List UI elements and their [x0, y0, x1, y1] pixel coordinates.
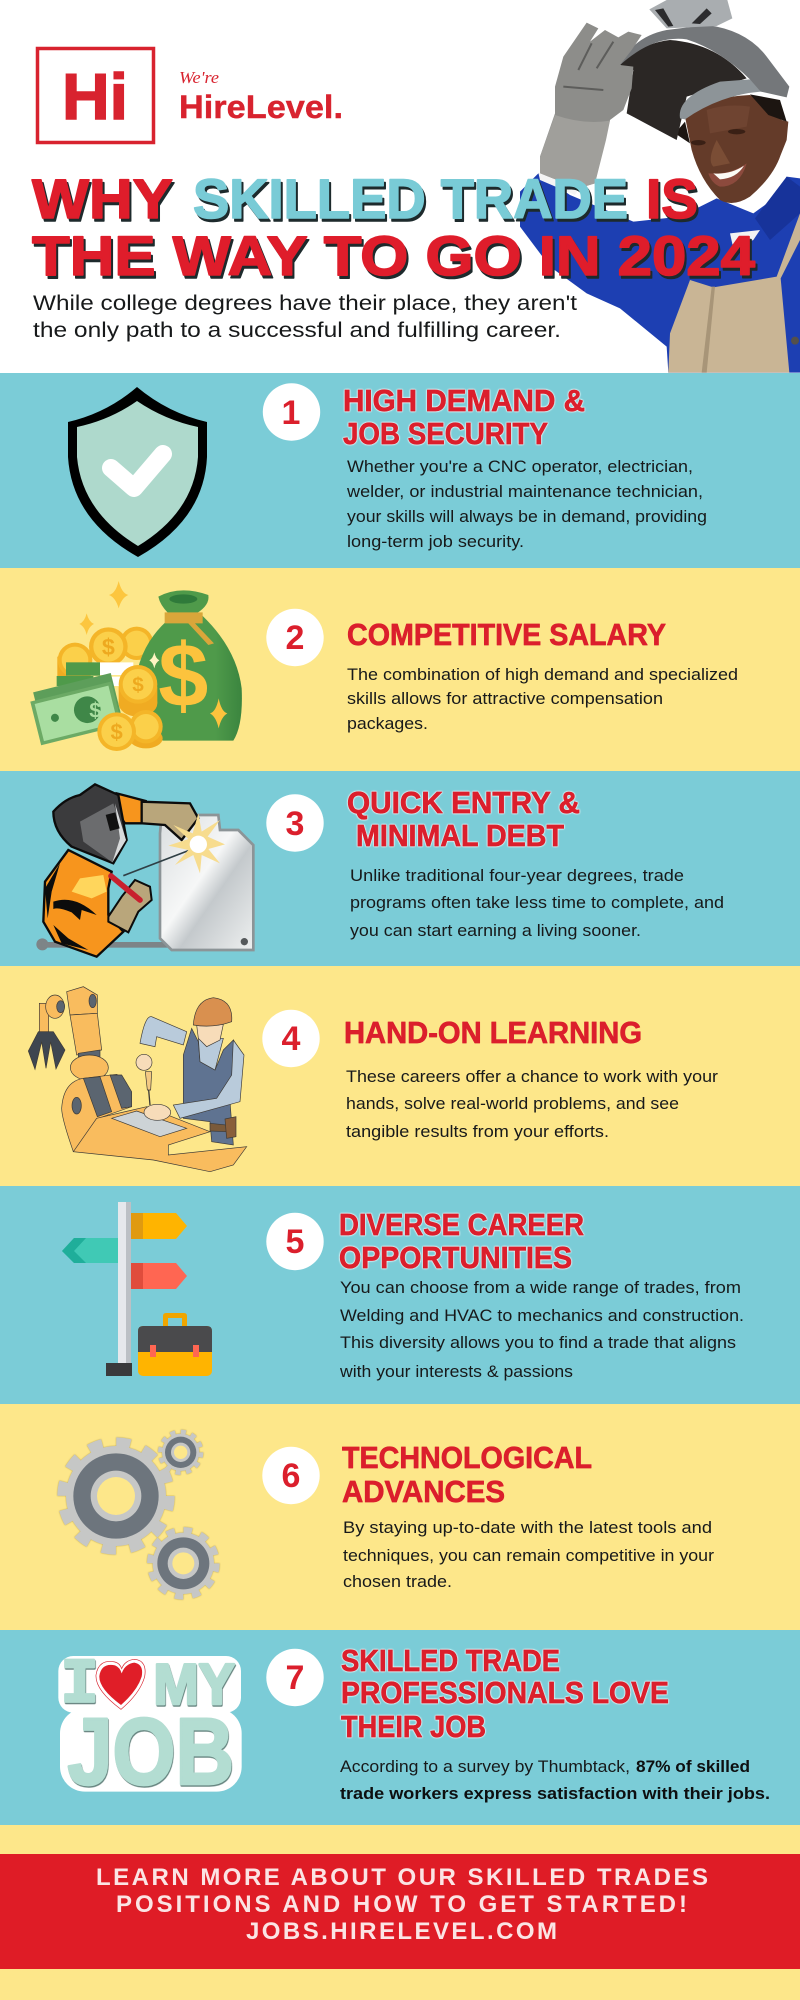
heading: [341, 1643, 669, 1744]
heading: [342, 1440, 592, 1509]
title: [32, 167, 755, 287]
call to action banner: LEARN MORE ABOUT OUR SKILLED TRADES: [96, 1864, 708, 1891]
logo mark: Hi: Hi: [62, 60, 128, 133]
body text: programs often take less time to complete, and: [350, 893, 724, 912]
logo wordmark: We're HireLevel: [179, 68, 343, 125]
number badge 6: [262, 1447, 320, 1504]
body text: techniques, you can remain competitive in your: [343, 1546, 714, 1565]
number badge 7: [266, 1649, 324, 1706]
heading: QUICK ENTRY &: [347, 785, 580, 820]
number badge 1: 1: [282, 394, 300, 432]
number badge 6: 6: [282, 1457, 300, 1495]
subtitle: While college degrees have their place, they aren't: [33, 292, 577, 315]
body text: chosen trade.: [343, 1572, 452, 1591]
title: WHY: [32, 167, 173, 230]
logo mark: Hi: [38, 48, 154, 142]
call to action banner: [0, 1854, 800, 1969]
icon: shield with check: [68, 387, 207, 557]
icon: money bag, coins and bills: $: [132, 674, 144, 697]
helmet window: [649, 0, 732, 28]
panel: technological advances: [0, 1404, 800, 1630]
subtitle: the only path to a successful and fulfilling career.: [33, 319, 561, 342]
icon: I love my job sticker: I: [61, 1650, 99, 1722]
body text: The combination of high demand and specialized: [347, 665, 738, 684]
body text: According to a survey by Thumbtack,: [340, 1757, 630, 1776]
icon: signpost and briefcase: [62, 1202, 212, 1376]
heading: OPPORTUNITIES: [339, 1240, 572, 1275]
number badge 4: [262, 1010, 320, 1067]
panel: hand-on learning: [0, 966, 800, 1186]
call to action banner: POSITIONS AND HOW TO GET STARTED!: [116, 1891, 687, 1918]
body text: 87% of skilled: [636, 1757, 750, 1776]
body text: Welding and HVAC to mechanics and construction.: [340, 1306, 744, 1325]
photo: smiling welder lifting helmet: [520, 0, 800, 373]
number badge 3: [266, 794, 324, 852]
body text: [339, 1278, 744, 1381]
yellow spacer band: [0, 1825, 800, 2000]
icon: I love my job sticker: JOB: [67, 1699, 234, 1805]
header panel: [0, 0, 800, 373]
number badge 5: [266, 1213, 324, 1270]
body text: trade workers express satisfaction with their jobs.: [340, 1784, 770, 1803]
body text: skills allows for attractive compensation: [347, 689, 663, 708]
panel: high demand and job security: [0, 373, 800, 568]
heading: HAND-ON LEARNING: [344, 1015, 642, 1050]
heading: HIGH DEMAND &: [343, 383, 585, 418]
heading: MINIMAL DEBT: [356, 818, 564, 853]
heading: [339, 1207, 584, 1275]
body text: [346, 457, 707, 551]
call to action banner: JOBS.HIRELEVEL.COM: [246, 1918, 557, 1945]
body text: [346, 1067, 718, 1141]
helmet interior: [620, 40, 747, 140]
body text: You can choose from a wide range of trades, from: [340, 1278, 741, 1297]
body text: [343, 1518, 714, 1591]
panel: quick entry and minimal debt: [0, 771, 800, 966]
title: SKILLED TRADE: [193, 167, 628, 230]
number badge 5: 5: [286, 1223, 304, 1261]
hair: [750, 94, 787, 122]
heading: ADVANCES: [342, 1474, 505, 1509]
logo wordmark: We're HireLevel: We're: [179, 68, 219, 87]
heading: THEIR JOB: [341, 1709, 486, 1744]
number badge 7: 7: [286, 1659, 304, 1697]
number badge 3: 3: [286, 805, 304, 843]
apron: [668, 213, 800, 373]
heading: [343, 383, 585, 451]
panel: competitive salary: [0, 568, 800, 771]
body text: packages.: [347, 714, 428, 733]
body text: [347, 665, 738, 733]
number badge 2: [266, 609, 324, 666]
body text: By staying up-to-date with the latest tools and: [343, 1518, 712, 1537]
icon: I love my job sticker: [58, 1650, 242, 1805]
subtitle: [33, 292, 577, 342]
body text: These careers offer a chance to work with your: [346, 1067, 718, 1086]
icon: worker with robot arm: [28, 987, 247, 1172]
body text: hands, solve real-world problems, and see: [346, 1094, 679, 1113]
headband: [680, 79, 761, 119]
face: [685, 95, 788, 203]
body text: your skills will always be in demand, providing: [347, 507, 707, 526]
body text: welder, or industrial maintenance technician,: [346, 482, 703, 501]
icon: money bag, coins and bills: $: [89, 698, 101, 723]
heading: JOB SECURITY: [343, 416, 548, 451]
title: THE WAY TO GO IN 2024: [32, 224, 755, 287]
heading: [347, 785, 580, 853]
number badge 4: 4: [282, 1020, 301, 1058]
logo wordmark: We're HireLevel: HireLevel.: [179, 89, 343, 125]
heading: TECHNOLOGICAL: [342, 1440, 592, 1475]
heading: COMPETITIVE SALARY: [347, 617, 666, 652]
icon: welder at metal plate: [36, 784, 253, 957]
helmet shell: [620, 25, 789, 97]
title: IS: [646, 167, 698, 230]
icon: money bag, coins and bills: $: [102, 634, 115, 660]
panel: skilled trade professionals love their job: [0, 1630, 800, 1825]
body text: Unlike traditional four-year degrees, trade: [350, 866, 684, 885]
heading: SKILLED TRADE: [341, 1643, 560, 1678]
body text: [340, 1757, 770, 1803]
body text: you can start earning a living sooner.: [350, 921, 641, 940]
panel: diverse career opportunities: [0, 1186, 800, 1404]
icon: money bag, coins and bills: $: [158, 627, 208, 727]
icon: money bag, coins and bills: $: [111, 719, 123, 744]
icon: money bag, coins and bills: [28, 581, 242, 751]
coverall: [520, 173, 800, 373]
icon: three gears: [63, 1432, 216, 1596]
body text: tangible results from your efforts.: [346, 1122, 609, 1141]
body text: This diversity allows you to find a trade that aligns: [340, 1333, 736, 1352]
heading: DIVERSE CAREER: [339, 1207, 584, 1242]
body text: with your interests & passions: [339, 1362, 573, 1381]
body text: long-term job security.: [347, 532, 524, 551]
number badge 1: [263, 383, 320, 441]
icon: I love my job sticker: MY: [153, 1653, 235, 1717]
body text: Whether you're a CNC operator, electrician,: [347, 457, 693, 476]
heading: PROFESSIONALS LOVE: [341, 1675, 669, 1710]
number badge 2: 2: [286, 619, 304, 657]
glove: [540, 23, 642, 188]
body text: [350, 866, 724, 940]
